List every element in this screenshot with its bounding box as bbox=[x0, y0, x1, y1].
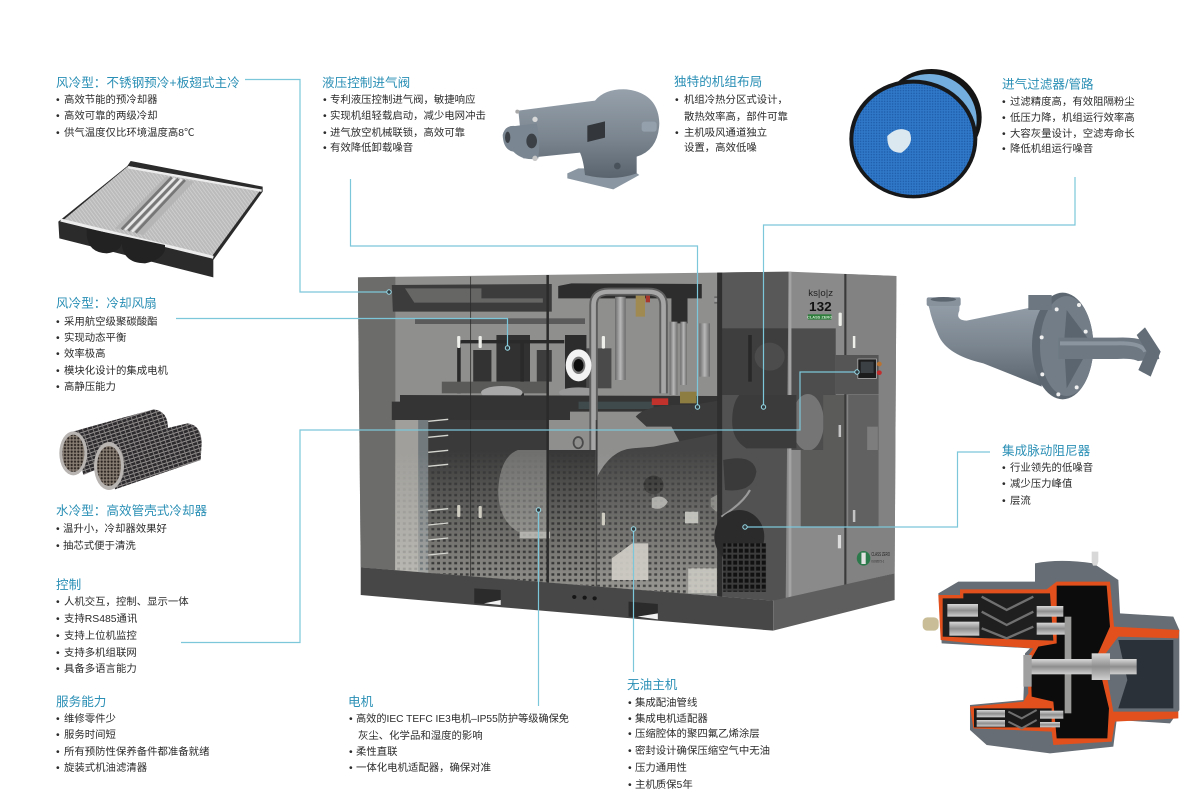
list: 实现动态平衡 bbox=[64, 331, 126, 344]
rotors bbox=[947, 597, 1067, 728]
list: • bbox=[56, 614, 60, 625]
list: • bbox=[56, 524, 60, 535]
logo: model badge bbox=[807, 288, 833, 320]
list: • bbox=[56, 631, 60, 642]
list bbox=[1002, 95, 1135, 155]
logo: class zero bbox=[857, 551, 890, 566]
list: 过滤精度高，有效阻隔粉尘 bbox=[1010, 95, 1135, 108]
heading: 液压控制进气阀 bbox=[322, 75, 410, 90]
right dark column bbox=[718, 272, 789, 602]
block: intake filter bbox=[1002, 76, 1135, 155]
upper beams bbox=[392, 284, 552, 312]
heading: 无油主机 bbox=[627, 678, 678, 692]
list: 支持上位机监控 bbox=[64, 629, 137, 642]
heading: 水冷型：高效管壳式冷却器 bbox=[56, 503, 208, 518]
list: • bbox=[628, 746, 632, 757]
block: unique layout bbox=[674, 74, 788, 154]
list: • bbox=[1002, 496, 1006, 507]
list: 降低机组运行噪音 bbox=[1010, 142, 1093, 155]
heading: 电机 bbox=[348, 695, 374, 709]
block: hydraulic intake valve bbox=[322, 75, 486, 154]
control panel bbox=[836, 355, 882, 394]
list: • bbox=[323, 143, 327, 154]
list: 实现机组轻载启动，减少电网冲击 bbox=[330, 109, 486, 122]
gear and shaft bbox=[1023, 617, 1137, 713]
logo: model badge: ks|o|z bbox=[808, 288, 833, 298]
list: 支持多机组联网 bbox=[64, 646, 137, 659]
list bbox=[56, 595, 189, 675]
list bbox=[56, 712, 209, 774]
damper drum inside machine bbox=[732, 395, 796, 448]
list: • bbox=[56, 541, 60, 552]
list: • bbox=[56, 763, 60, 774]
heading: 控制 bbox=[56, 578, 81, 592]
list bbox=[56, 522, 167, 552]
block: control bbox=[56, 578, 189, 675]
list: • bbox=[56, 382, 60, 393]
list bbox=[628, 696, 770, 791]
list: • bbox=[56, 111, 60, 122]
list: • bbox=[1002, 463, 1006, 474]
list: • bbox=[56, 664, 60, 675]
list: • bbox=[56, 747, 60, 758]
list: 主机吸风通道独立 bbox=[684, 126, 767, 139]
list: • bbox=[56, 714, 60, 725]
intake valve body bbox=[636, 408, 718, 442]
heading: 风冷型：冷却风扇 bbox=[56, 296, 157, 310]
logo: class zero: CLASS ZERO bbox=[871, 552, 890, 558]
list: 一体化电机适配器，确保对准 bbox=[356, 761, 491, 774]
seams bbox=[470, 277, 471, 577]
list bbox=[323, 93, 486, 154]
perforation overlay bbox=[395, 450, 720, 593]
eye bolt bbox=[574, 437, 583, 448]
list: 服务时间短 bbox=[64, 728, 116, 741]
block: pulsation damper bbox=[1002, 443, 1093, 507]
list: • bbox=[56, 333, 60, 344]
list: • bbox=[628, 714, 632, 725]
list: • bbox=[675, 95, 679, 106]
list: • bbox=[628, 780, 632, 791]
heading: 独特的机组布局 bbox=[674, 74, 762, 89]
block: oil-free air end bbox=[627, 678, 770, 791]
pipe u-bend bbox=[594, 292, 664, 502]
list: • bbox=[628, 698, 632, 709]
machine base bbox=[361, 567, 895, 631]
block: air-cooled pre-cooler bbox=[56, 75, 240, 139]
list: 灰尘、化学品和湿度的影响 bbox=[358, 729, 483, 742]
list: • bbox=[56, 317, 60, 328]
list: 压力通用性 bbox=[635, 761, 687, 774]
list: 层流 bbox=[1010, 494, 1031, 507]
list bbox=[349, 712, 569, 774]
list: • bbox=[675, 128, 679, 139]
list: 散热效率高，部件可靠 bbox=[684, 110, 788, 123]
list bbox=[675, 93, 788, 154]
vertical silver parts bbox=[615, 297, 626, 380]
list: 高效节能的预冷却器 bbox=[64, 93, 158, 106]
leader lines bbox=[176, 80, 1075, 706]
list: 压缩腔体的聚四氟乙烯涂层 bbox=[635, 727, 760, 740]
list: • bbox=[1002, 479, 1006, 490]
list bbox=[1002, 461, 1093, 507]
list: • bbox=[56, 648, 60, 659]
heading: 服务能力 bbox=[56, 694, 106, 709]
list: 效率极高 bbox=[64, 347, 106, 360]
list: • bbox=[56, 597, 60, 608]
list: 高静压能力 bbox=[64, 380, 116, 393]
image: intake air filter bbox=[849, 69, 982, 198]
machine side panel bbox=[786, 272, 896, 598]
list: 机组冷热分区式设计， bbox=[684, 93, 788, 106]
list: • bbox=[56, 366, 60, 377]
list: 进气放空机械联锁，高效可靠 bbox=[330, 126, 465, 139]
list: 有效降低卸载噪音 bbox=[330, 141, 413, 154]
list: • bbox=[1002, 144, 1006, 155]
list: • bbox=[628, 763, 632, 774]
list: • bbox=[323, 128, 327, 139]
list: 维修零件少 bbox=[64, 712, 116, 725]
list: • bbox=[323, 111, 327, 122]
list: • bbox=[56, 128, 60, 139]
list: • bbox=[349, 763, 353, 774]
list: • bbox=[349, 747, 353, 758]
list: 减少压力峰值 bbox=[1010, 477, 1072, 490]
logo: model badge: CLASS ZERO bbox=[807, 315, 832, 319]
list: 主机质保5年 bbox=[635, 778, 693, 791]
list: 温升小，冷却器效果好 bbox=[63, 522, 167, 535]
image: shell-and-tube coolers bbox=[59, 409, 202, 490]
list: 具备多语言能力 bbox=[64, 662, 137, 675]
logo: class zero: ISO8573-1 bbox=[871, 559, 885, 564]
list: 设置，高效低噪 bbox=[684, 141, 757, 154]
block: water-cooled cooler bbox=[56, 503, 208, 552]
list: 柔性直联 bbox=[356, 745, 398, 758]
list: • bbox=[628, 729, 632, 740]
block: cooling fan bbox=[56, 296, 169, 393]
list: 支持RS485通讯 bbox=[64, 612, 138, 625]
list bbox=[56, 93, 194, 139]
list: 高效的IEC TEFC IE3电机–IP55防护等级确保免 bbox=[356, 712, 569, 725]
list: 模块化设计的集成电机 bbox=[64, 364, 169, 377]
white flange bbox=[566, 349, 591, 381]
image: hydraulic intake valve bbox=[503, 89, 659, 189]
list: 集成电机适配器 bbox=[635, 712, 708, 725]
white dashes bbox=[428, 419, 448, 555]
list: • bbox=[323, 95, 327, 106]
list: 人机交互，控制、显示一体 bbox=[64, 595, 189, 608]
list: 密封设计确保压缩空气中无油 bbox=[635, 744, 770, 757]
white handles bbox=[457, 313, 855, 548]
list: 低压力降，机组运行效率高 bbox=[1010, 111, 1135, 124]
image: plate-fin cooler bbox=[58, 161, 263, 277]
list: • bbox=[349, 714, 353, 725]
list: 专利液压控制进气阀，敏捷响应 bbox=[330, 93, 475, 106]
logo: model badge: 132 bbox=[809, 299, 832, 314]
list: 行业领先的低噪音 bbox=[1010, 461, 1093, 474]
fan cylinders bbox=[473, 350, 491, 382]
motor bbox=[548, 450, 596, 587]
list: 高效可靠的两级冷却 bbox=[64, 109, 158, 122]
list: 所有预防性保养备件都准备就绪 bbox=[64, 745, 209, 758]
list: • bbox=[1002, 113, 1006, 124]
air end bbox=[597, 433, 718, 593]
heading: 风冷型：不锈钢预冷+板翅式主冷 bbox=[56, 75, 240, 90]
list: 集成配油管线 bbox=[635, 696, 697, 709]
list: 旋装式机油滤清器 bbox=[64, 761, 148, 774]
list: • bbox=[1002, 129, 1006, 140]
image: compressor cutaway bbox=[923, 552, 1179, 753]
list: • bbox=[56, 349, 60, 360]
list: 抽芯式便于清洗 bbox=[63, 539, 136, 552]
list: 采用航空级聚碳酸酯 bbox=[64, 315, 158, 328]
machine body front bbox=[350, 267, 793, 603]
image: compressor machine bbox=[350, 267, 896, 631]
leader dots bbox=[387, 290, 859, 531]
platform bbox=[392, 395, 718, 420]
list: 供气温度仅比环境温度高8℃ bbox=[64, 126, 194, 139]
list: • bbox=[56, 95, 60, 106]
heading: 集成脉动阻尼器 bbox=[1002, 443, 1091, 458]
list: 大容灰量设计，空滤寿命长 bbox=[1010, 127, 1135, 140]
list: • bbox=[1002, 97, 1006, 108]
heading: 进气过滤器/管路 bbox=[1002, 76, 1094, 92]
image: pulsation damper bbox=[927, 293, 1161, 399]
list: • bbox=[56, 730, 60, 741]
block: serviceability bbox=[56, 694, 209, 774]
block: motor bbox=[348, 695, 569, 774]
list bbox=[56, 315, 169, 393]
